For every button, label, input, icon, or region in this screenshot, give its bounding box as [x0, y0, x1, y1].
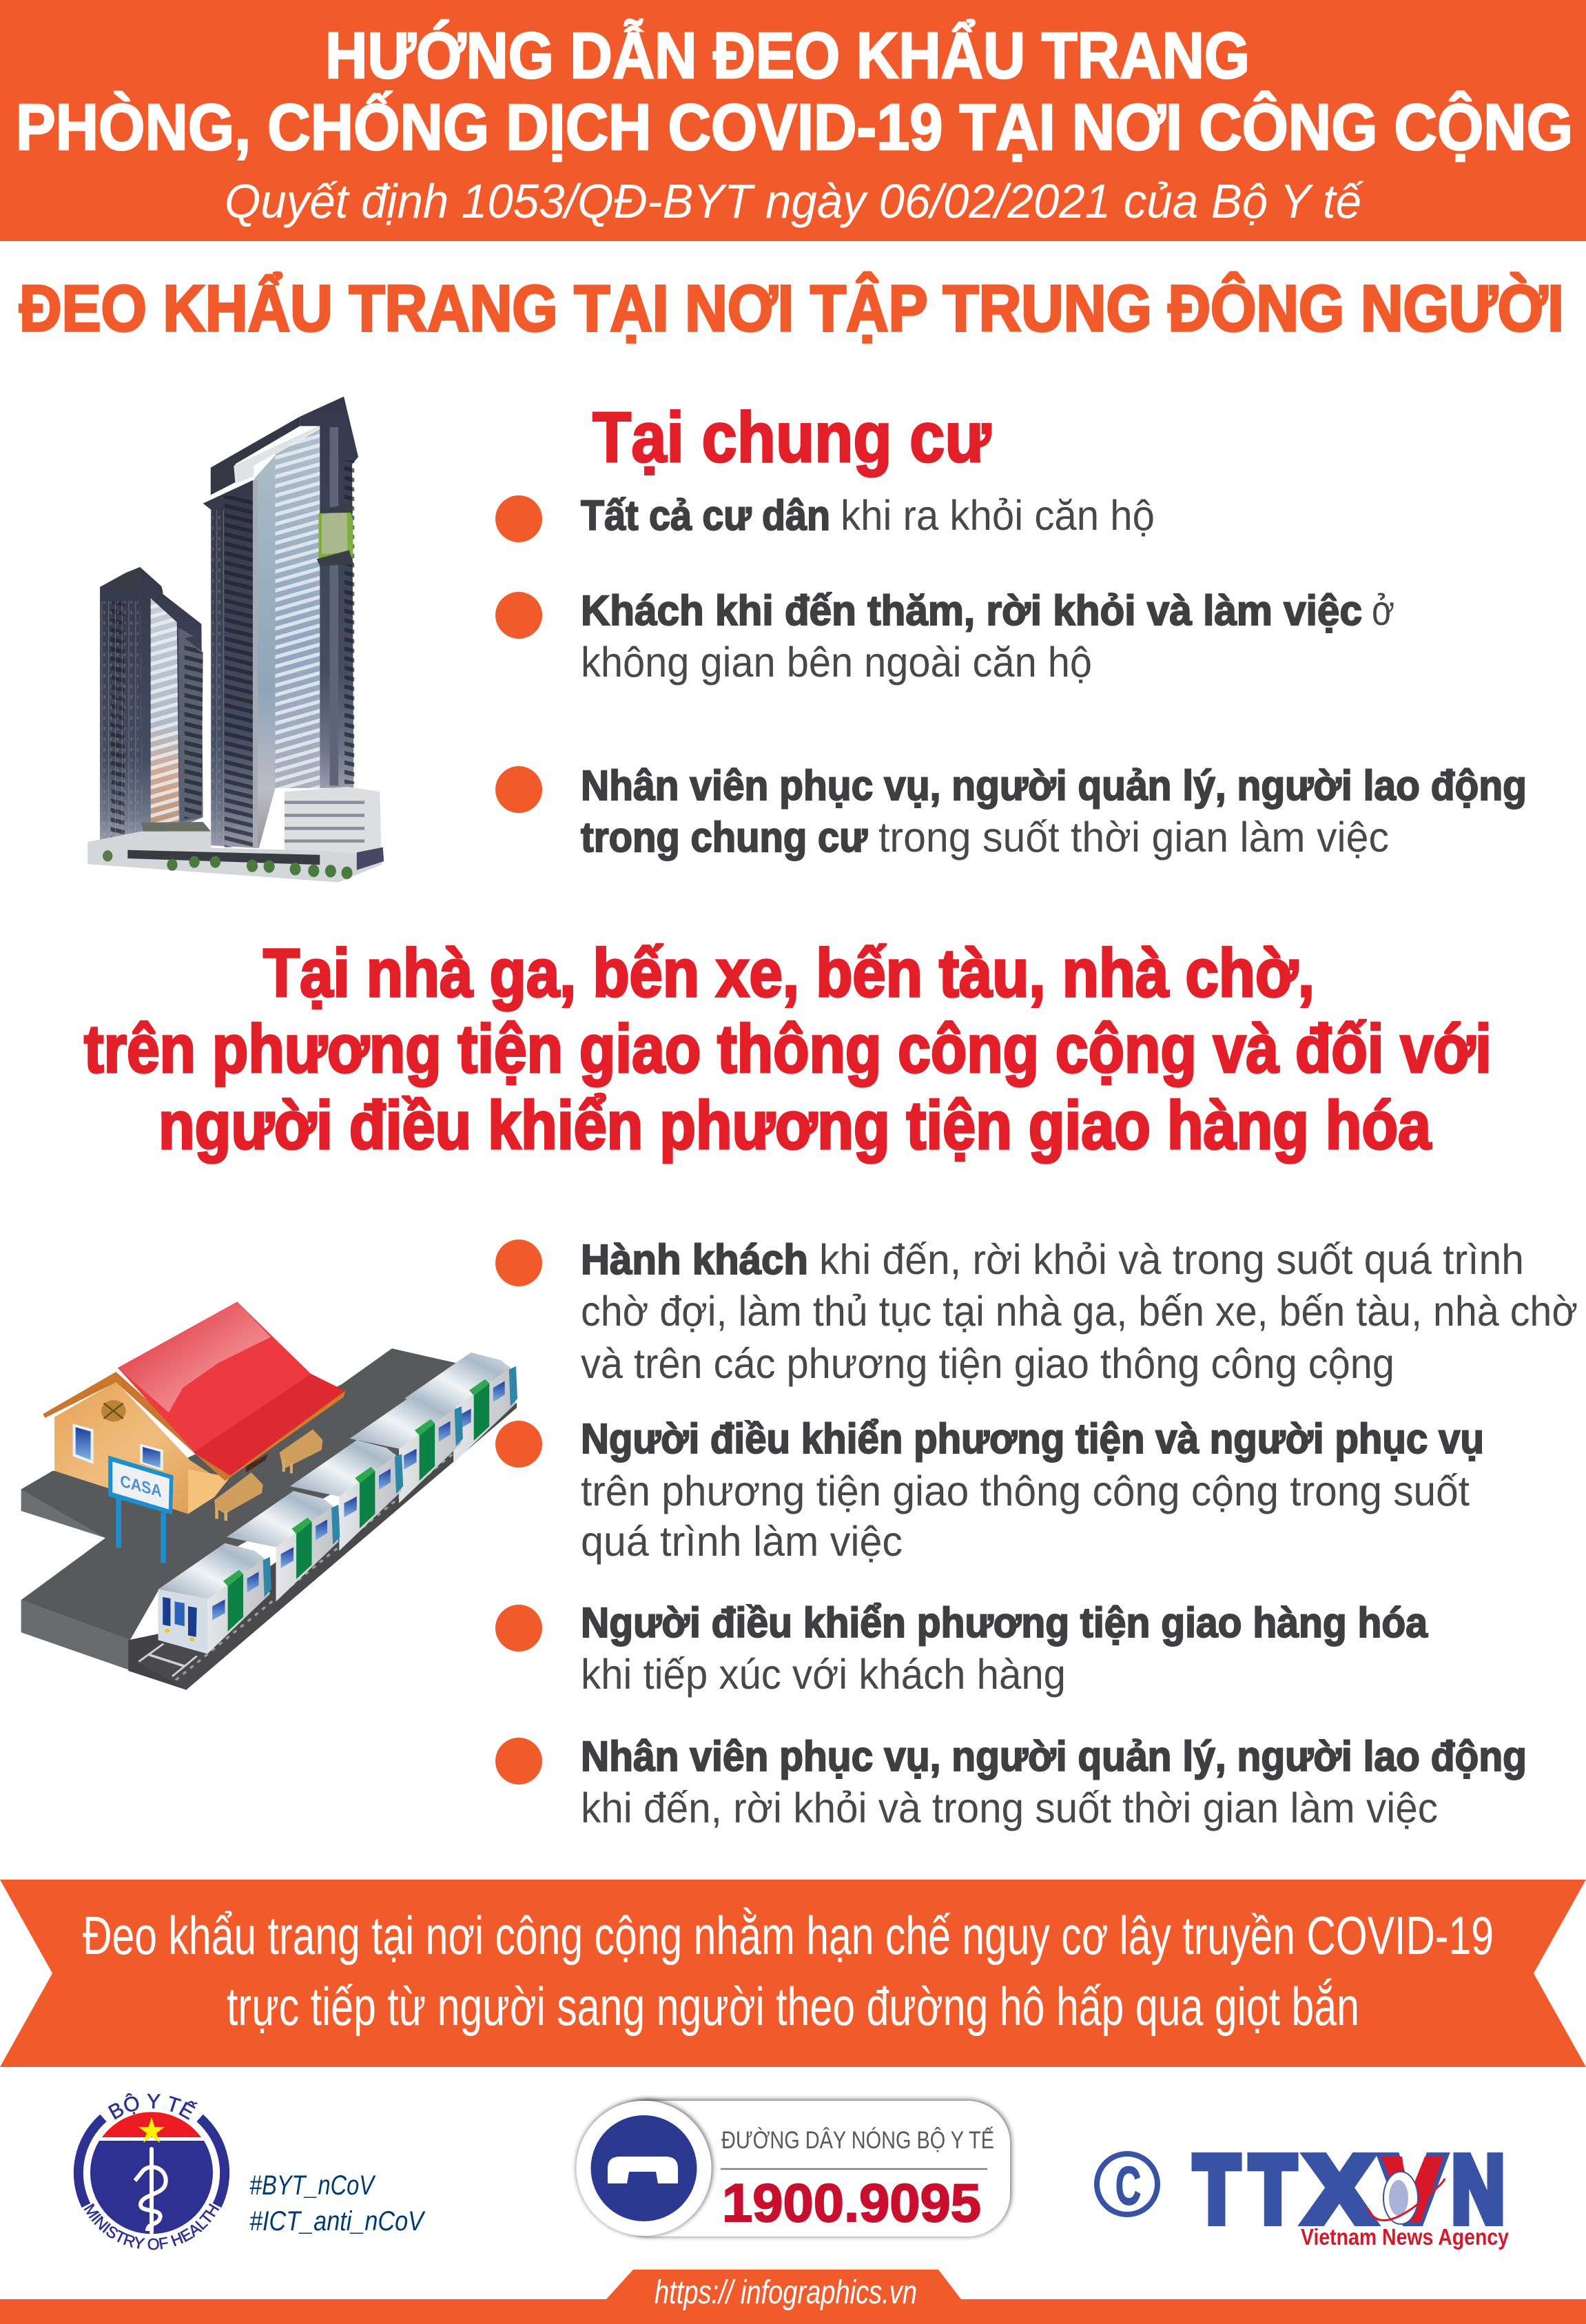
train cars: [158, 1353, 517, 1654]
header banner: [0, 0, 1586, 241]
bullet item 1: Hành khách: [581, 1236, 808, 1283]
bullet item 1: [495, 1236, 1578, 1387]
bullet item 2: [495, 1415, 1484, 1565]
bullet item 2: ở: [1372, 587, 1394, 634]
bullet item 2: [495, 587, 1394, 686]
bullet item 1: và trên các phương tiện giao thông công cộng: [581, 1340, 1394, 1387]
hashtags: #ICT_anti_nCoV: [249, 2206, 426, 2236]
benches: [214, 1430, 322, 1521]
hotline pill: ĐƯỜNG DÂY NÓNG BỘ Y TẾ: [721, 2126, 994, 2154]
logo: copyright symbol: C: [1115, 2155, 1141, 2216]
station sign: [108, 1455, 174, 1563]
bullet item 3: khi tiếp xúc với khách hàng: [581, 1651, 1066, 1698]
logo: TTXVN: X: [1305, 2137, 1374, 2243]
bullet item 3: [495, 762, 1527, 861]
ribbon banner message: [0, 1880, 1586, 2067]
logo: TTXVN: V: [1381, 2137, 1445, 2243]
logo: Ministry of Health: [73, 2093, 230, 2250]
footer bar with website tab: https:// infographics.vn: [655, 2274, 917, 2311]
hotline pill: [576, 2101, 1010, 2236]
bullet item 2: Khách khi đến thăm, rời khỏi và làm việc: [581, 587, 1362, 634]
footer bar with website tab: [0, 2270, 1586, 2324]
decision reference subtitle: Quyết định 1053/QĐ-BYT ngày 06/02/2021 của Bộ Y tế: [225, 174, 1364, 228]
transport section heading: [84, 935, 1492, 1163]
bullet item 4: Nhân viên phục vụ, người quản lý, người lao động: [581, 1733, 1527, 1780]
logo: TTXVN: N: [1452, 2137, 1505, 2243]
bullet item 4: khi đến, rời khỏi và trong suốt thời gian làm việc: [581, 1785, 1438, 1831]
illustration: railway station and train: [21, 1302, 517, 1690]
bullet item 1: [495, 492, 1155, 542]
logo: copyright symbol: [1097, 2154, 1157, 2216]
bullet item 2: không gian bên ngoài căn hộ: [581, 639, 1092, 686]
logo: Ministry of Health: MINISTRY OF HEALTH: [84, 2203, 219, 2250]
logo: TTXVN: [1194, 2137, 1510, 2250]
bullet item 3: Người điều khiển phương tiện giao hàng hóa: [581, 1599, 1428, 1646]
bullet item 1: Tất cả cư dân: [581, 492, 830, 539]
bullet item 3: [495, 1599, 1428, 1698]
logo: TTXVN: T: [1250, 2137, 1296, 2243]
subheading: at apartment buildings: Tại chung cư: [593, 398, 991, 477]
station sign: CASA: [120, 1471, 162, 1501]
icon: telephone handset: [591, 2115, 697, 2221]
station building: [43, 1302, 345, 1514]
logo: TTXVN: Vietnam News Agency: [1301, 2224, 1510, 2250]
list: transport rules: [495, 1236, 1578, 1831]
bullet item 4: [495, 1733, 1527, 1831]
logo: TTXVN: T: [1194, 2137, 1239, 2243]
bullet item 3: Nhân viên phục vụ, người quản lý, người lao động: [581, 762, 1527, 809]
logo: Ministry of Health: BỘ Y TẾ: [107, 2093, 198, 2120]
bullet item 1: khi ra khỏi căn hộ: [841, 492, 1155, 539]
bullet item 2: trên phương tiện giao thông công cộng trong suốt: [581, 1468, 1470, 1514]
hashtags: [249, 2170, 426, 2236]
transport section heading: người điều khiển phương tiện giao hàng hóa: [158, 1087, 1432, 1163]
bullet item 3: trong suốt thời gian làm việc: [878, 814, 1389, 861]
hashtags: #BYT_nCoV: [249, 2170, 376, 2201]
bullet item 3: trong chung cư: [581, 814, 868, 861]
hotline pill: 1900.9095: [722, 2172, 981, 2233]
illustration: apartment towers: [87, 397, 384, 883]
bullet item 1: khi đến, rời khỏi và trong suốt quá trình: [819, 1236, 1524, 1283]
title line 1: HƯỚNG DẪN ĐEO KHẨU TRANG: [325, 19, 1250, 92]
bullet item 2: Người điều khiển phương tiện và người phục vụ: [581, 1415, 1484, 1462]
transport section heading: Tại nhà ga, bến xe, bến tàu, nhà chờ,: [263, 935, 1315, 1011]
list: apartment rules: [495, 492, 1527, 861]
bullet item 2: quá trình làm việc: [581, 1518, 903, 1565]
